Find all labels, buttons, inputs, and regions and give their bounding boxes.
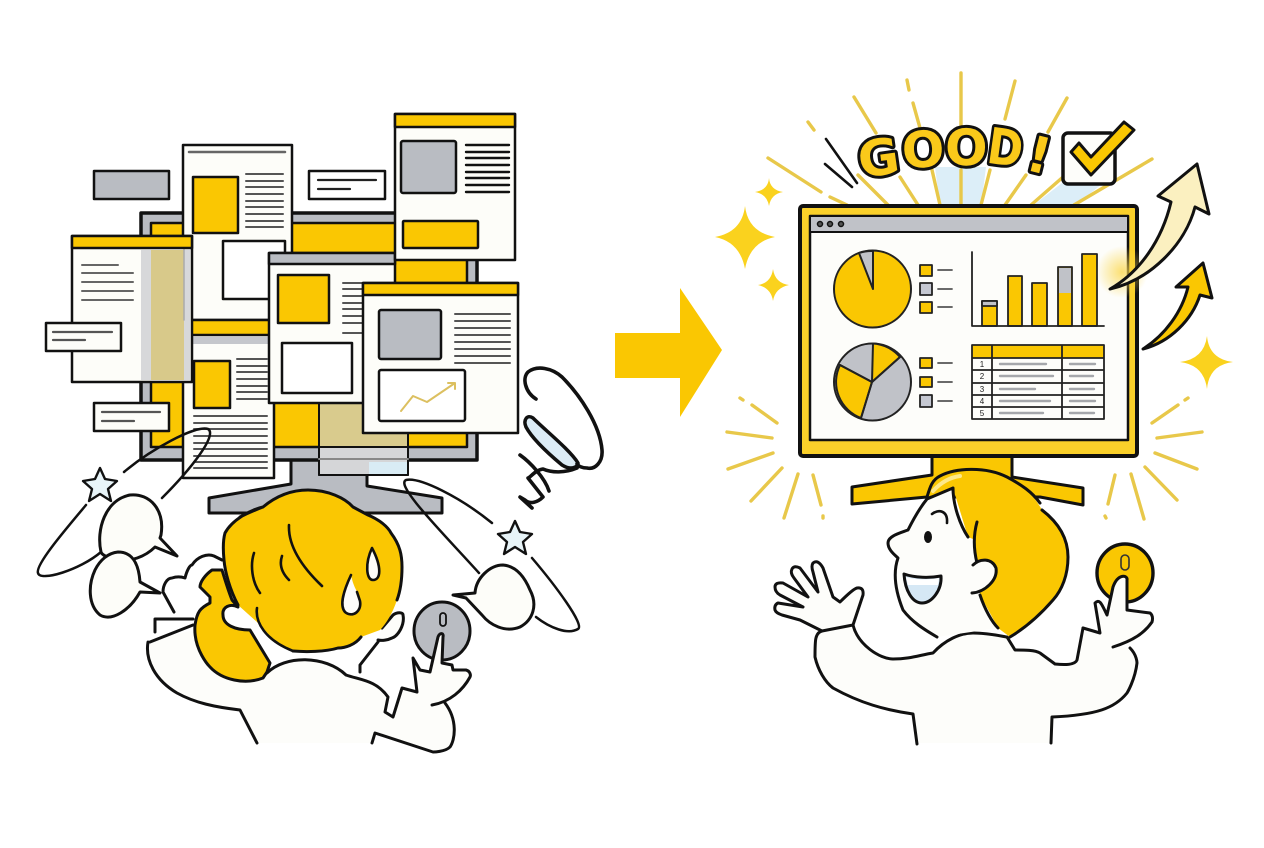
heading: GOOD!: O: [900, 120, 946, 180]
data table: 5: [980, 409, 985, 418]
heading: GOOD!: !: [1021, 125, 1057, 186]
document: top centre: [183, 145, 292, 325]
icon: checkbox with tick: [1063, 122, 1134, 184]
legend bottom: [920, 358, 952, 407]
icon: star left: [83, 468, 117, 501]
pie chart top: [834, 250, 911, 328]
ear: [378, 613, 403, 640]
icon: grey mouse: [414, 602, 470, 660]
pie chart bottom: [834, 344, 911, 420]
icon: speech bubble lower left: [90, 552, 160, 617]
heading: GOOD!: D: [984, 117, 1027, 179]
legend top: [920, 265, 952, 313]
panel: before, overwhelmed user: [38, 114, 602, 752]
rays: top burst: [768, 73, 1152, 205]
body: [815, 625, 1137, 743]
data table: 2: [980, 372, 985, 381]
person: happy user: [775, 469, 1153, 744]
hand on head: [163, 555, 222, 612]
monitor stand: [852, 455, 1083, 505]
label: small tag left: [46, 323, 121, 351]
icon: speech bubble top left: [100, 495, 177, 560]
glow at arrow tail: [1096, 246, 1148, 298]
icon: speech bubble right: [453, 565, 534, 629]
person: frustrated user from behind: [147, 490, 470, 752]
face: [888, 488, 998, 637]
arrow: yellow rising: [1143, 263, 1212, 349]
icon: yellow mouse: [1097, 544, 1153, 602]
monitor: dashboard screen: [800, 206, 1137, 456]
icon: star right: [498, 521, 532, 554]
document: lower right with trend chart: [363, 283, 518, 433]
mouth: [904, 574, 941, 603]
body: [147, 630, 454, 752]
eye: [924, 531, 932, 543]
arrow: transition from before to after: [615, 288, 722, 417]
light blue glow behind rays: [935, 167, 1103, 207]
monitor: cluttered left screen: [141, 213, 477, 513]
data table: 1: [980, 360, 985, 369]
browser title bar: [810, 216, 1128, 232]
data table: [972, 345, 1104, 419]
icon: sparkles: [715, 178, 1233, 389]
right clicking hand: [1083, 576, 1152, 647]
icon: angry scribble: [520, 368, 602, 508]
data table: 4: [980, 397, 985, 406]
hair: [223, 490, 402, 652]
ear: [972, 560, 996, 593]
data table: 3: [980, 385, 985, 394]
document: left with yellow header: [72, 236, 192, 382]
document: lower centre: [183, 320, 274, 478]
ponytail: [195, 570, 270, 681]
label: white tag top: [309, 171, 385, 199]
eyebrow: [932, 511, 947, 523]
bar chart: [972, 252, 1104, 326]
motion ticks: [825, 139, 857, 187]
document: top right: [395, 114, 515, 260]
label: grey tag: [94, 171, 169, 199]
label: small tag bottom: [94, 403, 169, 431]
hair: [927, 469, 1068, 637]
heading: GOOD!: [854, 117, 1057, 190]
dizzy orbit lines and stars: [38, 429, 579, 631]
heading: GOOD!: G: [854, 127, 903, 190]
document: centre with grey header: [269, 253, 395, 403]
heading: GOOD!: O: [945, 119, 988, 177]
clicking hand: [413, 634, 470, 705]
panel: after, happy user: [715, 73, 1233, 744]
rays: lower burst: [727, 398, 1202, 519]
hair strands: [252, 525, 322, 651]
hair highlight: [933, 476, 960, 491]
arrow: pale rising: [1110, 164, 1209, 289]
translucent window below centre: [319, 404, 408, 475]
icon: sweat drops: [342, 548, 379, 614]
left raised hand: [775, 562, 863, 631]
